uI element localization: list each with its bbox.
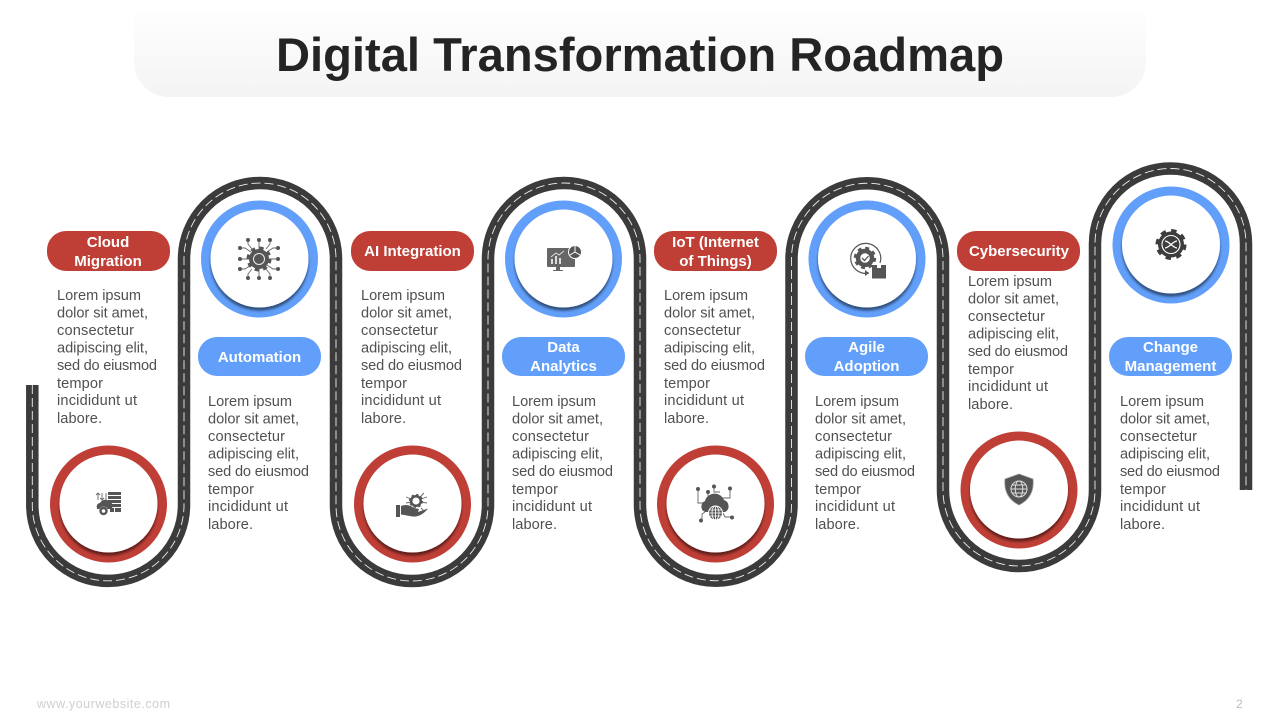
icon badge: data analytics (505, 200, 622, 318)
text: Cybersecurity body: dolor sit amet, (968, 292, 1059, 308)
text: Change Management body (1120, 394, 1220, 533)
text: AI Integration body: tempor (361, 376, 407, 392)
text: Cybersecurity body: adipiscing elit, (968, 326, 1059, 342)
step 8: Change Management (1109, 186, 1232, 533)
step 4: Data Analytics (502, 200, 625, 533)
icon badge: cybersecurity (960, 432, 1078, 548)
label: Data Analytics: Analytics (530, 358, 597, 375)
text: Cybersecurity body: consectetur (968, 309, 1045, 325)
text: Data Analytics body (512, 394, 613, 533)
step 3: AI Integration (351, 231, 474, 562)
text: Agile Adoption body: consectetur (815, 429, 892, 445)
text: IoT body: incididunt ut (664, 393, 744, 409)
icon badge: IoT (657, 446, 774, 562)
step 1: Cloud Migration (47, 231, 170, 562)
text: Cybersecurity body (968, 274, 1068, 413)
text: Agile Adoption body: tempor (815, 482, 861, 498)
label: Change Management (1109, 337, 1232, 376)
label: Agile Adoption: Agile (848, 339, 885, 356)
icon badge: agile adoption (808, 200, 926, 318)
icon badge: cloud migration (50, 446, 167, 562)
label: Data Analytics: Data (547, 339, 580, 356)
text: AI Integration body (361, 288, 462, 427)
label: AI Integration (351, 231, 474, 271)
text: Automation body: incididunt ut (208, 499, 288, 515)
text: Agile Adoption body: adipiscing elit, (815, 446, 906, 462)
winding road (32, 168, 1246, 581)
text: Cloud Migration body: adipiscing elit, (57, 340, 148, 356)
text: Cybersecurity body: incididunt ut (968, 379, 1048, 395)
text: AI Integration body: consectetur (361, 323, 438, 339)
label: Cloud Migration: Migration (74, 253, 142, 270)
text: Cybersecurity body: labore. (968, 397, 1013, 413)
text: Automation body: Lorem ipsum (208, 394, 292, 410)
text: IoT body: sed do eiusmod (664, 358, 765, 374)
icon badge: AI integration (354, 446, 471, 562)
page number: 2 (1236, 697, 1243, 711)
text: Change Management body: tempor (1120, 482, 1166, 498)
text: Automation body: consectetur (208, 429, 285, 445)
title panel (134, 10, 1146, 97)
text: Cloud Migration body: incididunt ut (57, 393, 137, 409)
text: Data Analytics body: Lorem ipsum (512, 394, 596, 410)
label: IoT (Internet of Things): of Things) (679, 253, 752, 270)
label: Cloud Migration (47, 231, 170, 271)
text: Automation body: dolor sit amet, (208, 412, 299, 428)
text: Cloud Migration body: consectetur (57, 323, 134, 339)
text: Agile Adoption body: sed do eiusmod (815, 464, 915, 480)
text: Data Analytics body: tempor (512, 482, 558, 498)
footer website: www.yourwebsite.com (36, 697, 170, 711)
text: AI Integration body: sed do eiusmod (361, 358, 462, 374)
text: Data Analytics body: sed do eiusmod (512, 464, 613, 480)
text: Automation body: tempor (208, 482, 254, 498)
text: IoT body: tempor (664, 376, 710, 392)
icon badge: change management (1112, 186, 1230, 304)
text: Cloud Migration body (57, 288, 157, 427)
label: Data Analytics (502, 337, 625, 376)
text: Change Management body: Lorem ipsum (1120, 394, 1204, 410)
label: Agile Adoption: Adoption (834, 358, 899, 375)
text: IoT body: Lorem ipsum (664, 288, 748, 304)
label: Change Management: Change (1143, 339, 1198, 356)
text: AI Integration body: dolor sit amet, (361, 306, 452, 322)
text: Cloud Migration body: tempor (57, 376, 103, 392)
text: Automation body: adipiscing elit, (208, 446, 299, 462)
text: Cybersecurity body: tempor (968, 362, 1014, 378)
label: Cybersecurity: Cybersecurity (969, 243, 1070, 260)
label: IoT (Internet of Things) (654, 231, 777, 271)
text: Data Analytics body: consectetur (512, 429, 589, 445)
text: AI Integration body: adipiscing elit, (361, 340, 452, 356)
text: Cloud Migration body: labore. (57, 411, 102, 427)
label: Cloud Migration: Cloud (87, 234, 129, 251)
text: Data Analytics body: adipiscing elit, (512, 446, 603, 462)
text: IoT body (664, 288, 765, 427)
label: Change Management: Management (1125, 358, 1216, 375)
text: Data Analytics body: dolor sit amet, (512, 412, 603, 428)
title: Digital Transformation Roadmap (276, 29, 1004, 82)
text: Automation body: sed do eiusmod (208, 464, 309, 480)
text: Cloud Migration body: Lorem ipsum (57, 288, 141, 304)
text: Cybersecurity body: Lorem ipsum (968, 274, 1052, 290)
text: Cloud Migration body: dolor sit amet, (57, 306, 148, 322)
label: Automation (198, 337, 321, 376)
label: Agile Adoption (805, 337, 928, 376)
text: Agile Adoption body: dolor sit amet, (815, 412, 906, 428)
text: Automation body: labore. (208, 517, 253, 533)
label: Automation: Automation (218, 349, 301, 366)
text: Data Analytics body: labore. (512, 517, 557, 533)
text: Change Management body: consectetur (1120, 429, 1197, 445)
label: AI Integration: AI Integration (364, 243, 461, 260)
text: Change Management body: dolor sit amet, (1120, 412, 1210, 428)
text: Cybersecurity body: sed do eiusmod (968, 344, 1068, 360)
step 5: IoT (654, 231, 777, 562)
text: Cloud Migration body: sed do eiusmod (57, 358, 157, 374)
text: IoT body: labore. (664, 411, 709, 427)
label: IoT (Internet of Things): IoT (Internet (672, 234, 759, 251)
text: Agile Adoption body (815, 394, 915, 533)
text: Automation body (208, 394, 309, 533)
text: Agile Adoption body: incididunt ut (815, 499, 895, 515)
text: Agile Adoption body: labore. (815, 517, 860, 533)
text: Change Management body: labore. (1120, 517, 1165, 533)
text: AI Integration body: Lorem ipsum (361, 288, 445, 304)
label: Cybersecurity (957, 231, 1080, 271)
text: Change Management body: incididunt ut (1120, 499, 1200, 515)
text: AI Integration body: labore. (361, 411, 406, 427)
step 7: Cybersecurity (957, 231, 1080, 548)
text: IoT body: adipiscing elit, (664, 340, 755, 356)
icon badge: automation (201, 200, 318, 318)
step 6: Agile Adoption (805, 200, 928, 533)
text: Change Management body: sed do eiusmod (1120, 464, 1220, 480)
text: IoT body: dolor sit amet, (664, 306, 755, 322)
text: Agile Adoption body: Lorem ipsum (815, 394, 899, 410)
step 2: Automation (198, 200, 321, 533)
text: AI Integration body: incididunt ut (361, 393, 441, 409)
text: Data Analytics body: incididunt ut (512, 499, 592, 515)
text: Change Management body: adipiscing elit, (1120, 446, 1210, 462)
text: IoT body: consectetur (664, 323, 741, 339)
